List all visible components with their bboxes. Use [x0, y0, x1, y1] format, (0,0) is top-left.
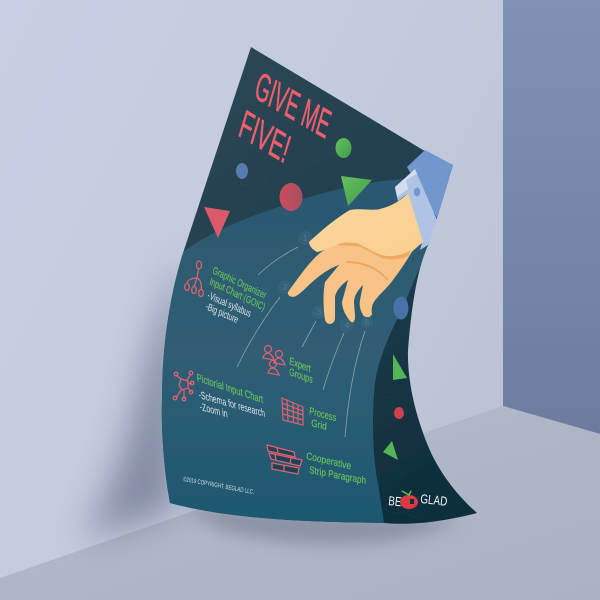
icon: bricks: [267, 445, 302, 474]
heading line 2: Input Chart (GOIC): [208, 276, 266, 314]
logo apple leaf: [402, 491, 411, 495]
green triangle: [341, 176, 372, 206]
logo: [388, 491, 448, 509]
heading: Graphic Organizer: [211, 265, 268, 302]
poster dark background: [162, 47, 477, 524]
logo BE: BE: [388, 493, 402, 509]
finger number markers: [278, 231, 373, 332]
poster: [150, 47, 477, 530]
marker 2: 2: [283, 283, 288, 292]
red circle: [280, 183, 302, 211]
item: cooperative strip paragraph: [267, 445, 366, 487]
upper hand back: [309, 193, 423, 258]
green cone: [393, 354, 407, 380]
bullet 2: -Zoom in: [199, 402, 229, 421]
icon: grid: [282, 398, 303, 425]
marker 1: 1: [303, 234, 308, 243]
hand illustration: [288, 150, 453, 324]
item: process grid: [282, 398, 337, 433]
red dot: [394, 407, 404, 419]
icon: hub: [173, 371, 194, 401]
cuff button: [414, 188, 420, 196]
green triangle: [383, 441, 398, 460]
label line 1: Cooperative: [306, 451, 352, 472]
poster shadow on floor: [180, 505, 460, 544]
marker 5: 5: [365, 318, 370, 327]
title line 1: GIVE ME: [250, 64, 335, 148]
marker 4: 4: [345, 321, 350, 330]
item: pictorial input chart: [173, 371, 266, 421]
blue ellipse: [394, 296, 408, 320]
bullet 1: -Schema for research: [198, 390, 266, 420]
floor: [0, 406, 600, 600]
shirt cuff: [395, 169, 437, 250]
bullet 2: -Big picture: [204, 301, 239, 326]
blue circle: [236, 163, 248, 179]
red triangle: [204, 207, 230, 238]
heading: Pictorial Input Chart: [196, 373, 264, 406]
title: [234, 64, 335, 173]
bullet 1: -Visual syllabus: [206, 290, 252, 320]
copyright: ©2019 COPYRIGHT. BEGLAD LLC.: [183, 475, 255, 496]
decorative shapes right: [383, 296, 408, 460]
label line 2: Strip Paragraph: [309, 465, 366, 487]
icon: people: [263, 346, 285, 375]
doodle texture: [324, 146, 426, 518]
logo apple window: [410, 499, 414, 504]
jacket sleeve: [407, 150, 453, 218]
green circle: [336, 138, 352, 158]
item: graphic organizer: [185, 261, 268, 326]
poster teal panel: [150, 178, 430, 530]
marker 3: 3: [317, 308, 322, 317]
item: expert groups: [263, 346, 313, 386]
decorative shapes upper: [204, 138, 372, 238]
poster shadow on wall: [85, 255, 185, 540]
logo GLAD: GLAD: [420, 491, 448, 509]
title line 2: FIVE!: [234, 102, 295, 173]
logo apple: [400, 495, 418, 509]
motion lines: [237, 247, 365, 437]
label line 1: Expert: [289, 356, 311, 375]
cuff highlight: [395, 169, 417, 197]
lower hand and fingers: [288, 243, 413, 324]
icon: hierarchy: [185, 261, 203, 296]
recessed wall niche: [503, 0, 600, 434]
label line 1: Process: [309, 406, 337, 424]
hand crease: [346, 262, 388, 280]
hand shade band: [337, 242, 411, 259]
label line 2: Groups: [289, 367, 313, 386]
label line 2: Grid: [311, 418, 327, 433]
